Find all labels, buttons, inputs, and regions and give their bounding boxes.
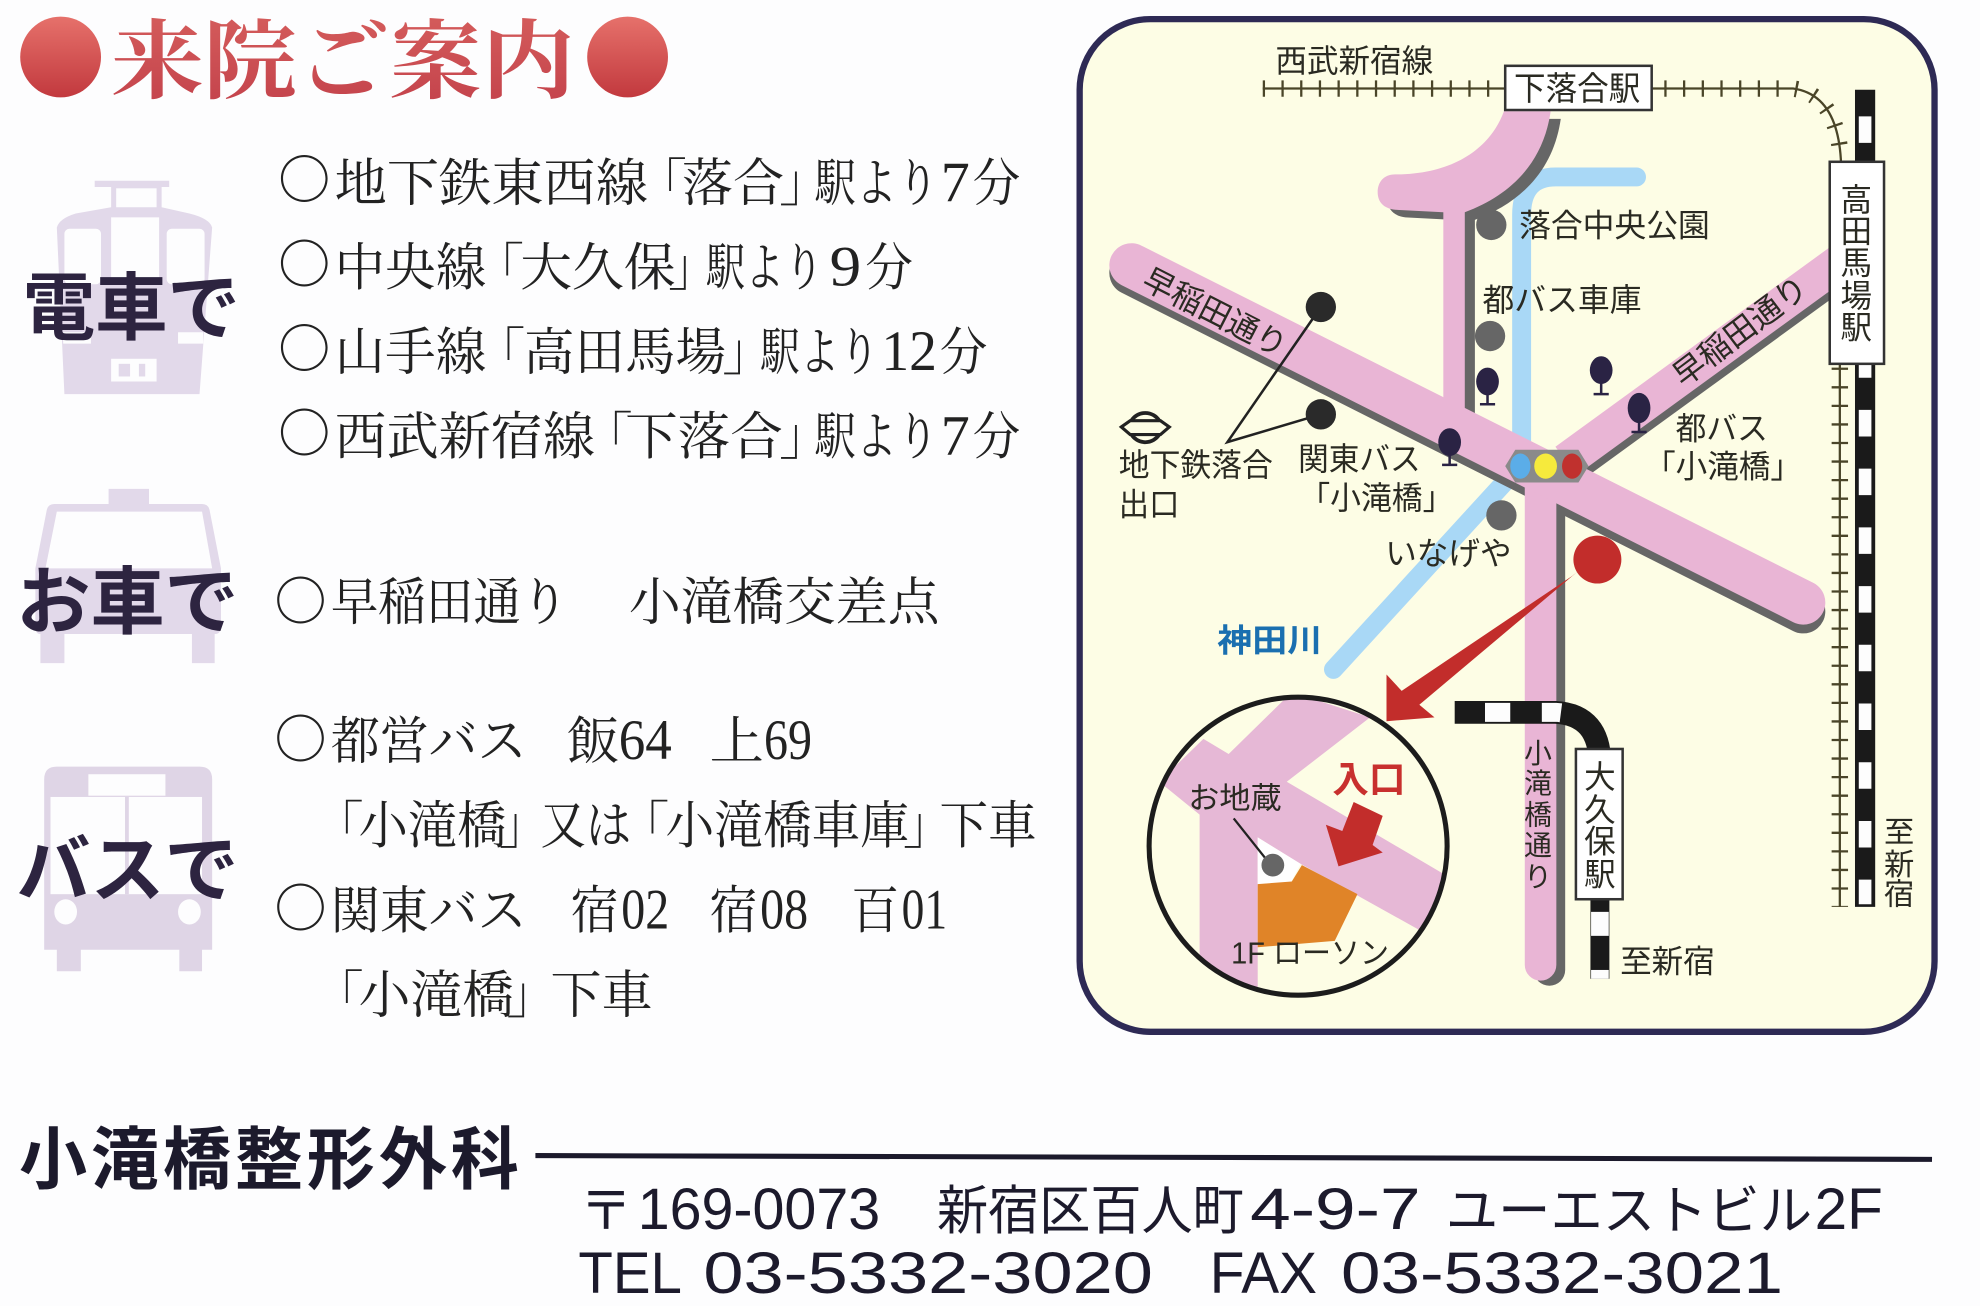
label: Ochiai Chuo Park: 落合中央公園 [1519, 207, 1710, 243]
row: Toei stop names: 「 [617, 784, 669, 859]
row: Yamanote line: 駅より [759, 310, 879, 385]
row: Kanto stop name: 小滝橋 [359, 953, 514, 1028]
row: Tozai line: 「 [635, 141, 687, 216]
row: Toei stop names: 下車 [939, 784, 1037, 859]
label: subway exit: 地下鉄落合 [1119, 447, 1273, 483]
row: Seibu Shinjuku line: 「 [581, 395, 633, 470]
icon: bus stops [1438, 356, 1650, 465]
station: Okubo [1576, 749, 1623, 899]
station: Takadanobaba [1830, 162, 1884, 364]
row: Tozai line: 分 [972, 141, 1020, 216]
address [578, 1177, 1883, 1306]
row: Kanto stop name: 」 [506, 953, 558, 1028]
label: to Shinjuku bottom: 至新宿 [1620, 943, 1715, 979]
zoomed inset map [1149, 692, 1447, 998]
row: Chuo line: 駅より [705, 226, 823, 301]
address: 03-5332-3021 [1341, 1241, 1783, 1306]
row: Tozai line: 落合 [682, 141, 784, 216]
row: Tozai line: ○ [278, 138, 331, 214]
row: Seibu Shinjuku line: 西武新宿線 [335, 395, 595, 470]
row: Tozai line: 7 [941, 151, 970, 214]
station: Shimo-Ochiai: 下落合駅 [1514, 70, 1640, 107]
row: Toei stop names: 」 [903, 784, 955, 859]
row: Kanto bus: ○ [274, 867, 327, 943]
map background [1080, 19, 1935, 1032]
row: Yamanote line: 「 [474, 310, 525, 385]
label: subway exit: 出口 [1119, 486, 1179, 522]
label: Seibu Shinjuku line: 西武新宿線 [1275, 43, 1433, 79]
roads [1131, 111, 1844, 965]
JR Yamanote line track [1857, 90, 1873, 907]
row: Tozai line: 」 [779, 141, 831, 216]
row: Yamanote line: 高田馬場 [524, 310, 726, 385]
heading: by bus: バスで [16, 829, 239, 911]
address: 新宿区百人町 [937, 1182, 1244, 1241]
label: Kanto bus stop [1298, 441, 1453, 516]
inset label: entrance: 入口 [1332, 759, 1405, 800]
row: Toei bus: 64 [619, 709, 672, 772]
address: TEL [578, 1241, 682, 1306]
row: Yamanote line: 分 [939, 310, 987, 385]
row: Seibu Shinjuku line: 」 [779, 395, 831, 470]
row: Tozai line [278, 138, 1020, 216]
row: Toei bus: 上 [710, 699, 764, 774]
row: Kanto bus [274, 867, 947, 943]
row: Kanto bus: 関東バス [331, 868, 527, 943]
row: Toei bus: ○ [274, 698, 327, 774]
row: Kanto bus: 宿 [571, 868, 619, 943]
river: Kanda [1333, 177, 1637, 669]
row: Yamanote line [278, 308, 987, 385]
row: Kanto stop name: 「 [312, 953, 364, 1028]
row: Yamanote line: ○ [278, 308, 331, 384]
row: Toei bus: 都営バス [331, 699, 527, 774]
row: Seibu Shinjuku line: 下落合 [625, 395, 783, 470]
row: Chuo line: ○ [278, 223, 331, 299]
heading: by train: 電車で [23, 268, 240, 350]
address: 2F [1815, 1177, 1883, 1242]
row: Kanto bus: 百 [851, 868, 899, 943]
row: Kanto stop name: 下車 [551, 953, 653, 1028]
row: Toei bus [274, 698, 812, 774]
label: Toei bus stop [1644, 411, 1802, 484]
icon: landmark dots [1475, 210, 1517, 531]
footer rule [535, 1156, 1932, 1159]
row: Chuo line: 分 [865, 226, 913, 301]
row: Toei stop names: 又は [540, 784, 631, 859]
label: subway exit [1119, 447, 1273, 522]
row: Toei stop names [312, 784, 1037, 859]
clinic name: 小滝橋整形外科 [19, 1122, 519, 1198]
row: Kanto bus: 08 [760, 878, 808, 941]
text block: bus directions [274, 698, 1037, 1028]
text block: car directions: 早稲田通り [331, 560, 568, 635]
panel: map [1080, 19, 1935, 1032]
station: Takadanobaba: 高田馬場駅 [1840, 182, 1872, 346]
Seibu Shinjuku line track [1263, 89, 1841, 907]
text block: train directions [278, 138, 1020, 470]
label: Kanto bus stop: 関東バス [1298, 441, 1421, 477]
row: Toei stop names: 」 [499, 784, 551, 859]
heading: by car: お車で [16, 562, 239, 644]
address: FAX [1210, 1241, 1317, 1306]
icon: subway mark [1121, 413, 1169, 442]
label: Waseda-dori right: 早稲田通り [1666, 269, 1815, 393]
row: Chuo line: 」 [668, 226, 720, 301]
row: Toei stop names: 小滝橋 [359, 784, 506, 859]
row: Toei stop names: 「 [312, 784, 364, 859]
label: Kanda river: 神田川 [1217, 623, 1322, 659]
row: Kanto bus: 宿 [710, 868, 758, 943]
label: Waseda-dori left: 早稲田通り [1137, 261, 1293, 364]
label: Toei bus depot: 都バス車庫 [1482, 282, 1642, 318]
row: Yamanote line: 」 [722, 310, 774, 385]
text block: car directions [274, 560, 941, 636]
address: 03-5332-3020 [703, 1241, 1153, 1306]
title [20, 0, 668, 116]
text block: car directions: 小滝橋交差点 [629, 560, 941, 635]
row: Toei bus: 69 [764, 709, 812, 772]
icon: car [35, 489, 221, 663]
row: Chuo line: 中央線 [335, 226, 486, 301]
label: Inageya: いなげや [1385, 536, 1512, 572]
row: Chuo line: 9 [830, 236, 861, 299]
row: Chuo line [278, 223, 913, 301]
inset arrow: entrance [1326, 802, 1383, 866]
row: Seibu Shinjuku line: 分 [972, 395, 1020, 470]
row: Yamanote line: 山手線 [335, 310, 486, 385]
row: Seibu Shinjuku line: ○ [278, 392, 331, 468]
address: 4-9-7 [1250, 1177, 1421, 1242]
address: 〒 [580, 1182, 633, 1241]
road shadows [1131, 119, 1847, 970]
row: Tozai line: 地下鉄東西線 [335, 141, 648, 216]
row: Toei stop names: 小滝橋車庫 [665, 784, 909, 859]
row: Seibu Shinjuku line: 7 [941, 405, 970, 468]
row: Chuo line: 「 [472, 226, 524, 301]
label: Toei bus stop: 都バス [1676, 411, 1768, 447]
label: to Shinjuku right: 至新宿 [1884, 816, 1914, 911]
row: Tozai line: 駅より [814, 141, 938, 216]
arrow: clinic location to zoom [1387, 536, 1621, 721]
icon: train [57, 181, 212, 394]
row: Toei bus: 飯 [567, 699, 619, 774]
row: Kanto bus: 01 [902, 878, 947, 941]
label: Kotakibashi-dori: 小滝橋通り [1524, 738, 1552, 893]
label: Kanto bus stop: 「小滝橋」 [1299, 480, 1453, 516]
icon: traffic light [1505, 450, 1589, 483]
row: Kanto stop name [312, 953, 653, 1028]
address: 169-0073 [638, 1177, 880, 1242]
row: Chuo line: 大久保 [520, 226, 676, 301]
address: ユーエストビル [1446, 1182, 1812, 1241]
JR Chuo line track [1455, 712, 1609, 979]
inset label: Lawson: 1F ローソン [1231, 938, 1389, 971]
label: Toei bus stop: 「小滝橋」 [1644, 448, 1802, 484]
row: Seibu Shinjuku line [278, 392, 1020, 470]
inset label: jizo: お地蔵 [1188, 781, 1282, 815]
station: Okubo: 大久保駅 [1584, 759, 1616, 892]
icon: bus [44, 767, 212, 971]
row: Seibu Shinjuku line: 駅より [814, 395, 938, 470]
row: Yamanote line: 12 [881, 320, 937, 383]
icon: subway exit pointers [1227, 292, 1336, 442]
row: Kanto bus: 02 [621, 878, 669, 941]
text block: car directions: ○ [274, 560, 327, 636]
